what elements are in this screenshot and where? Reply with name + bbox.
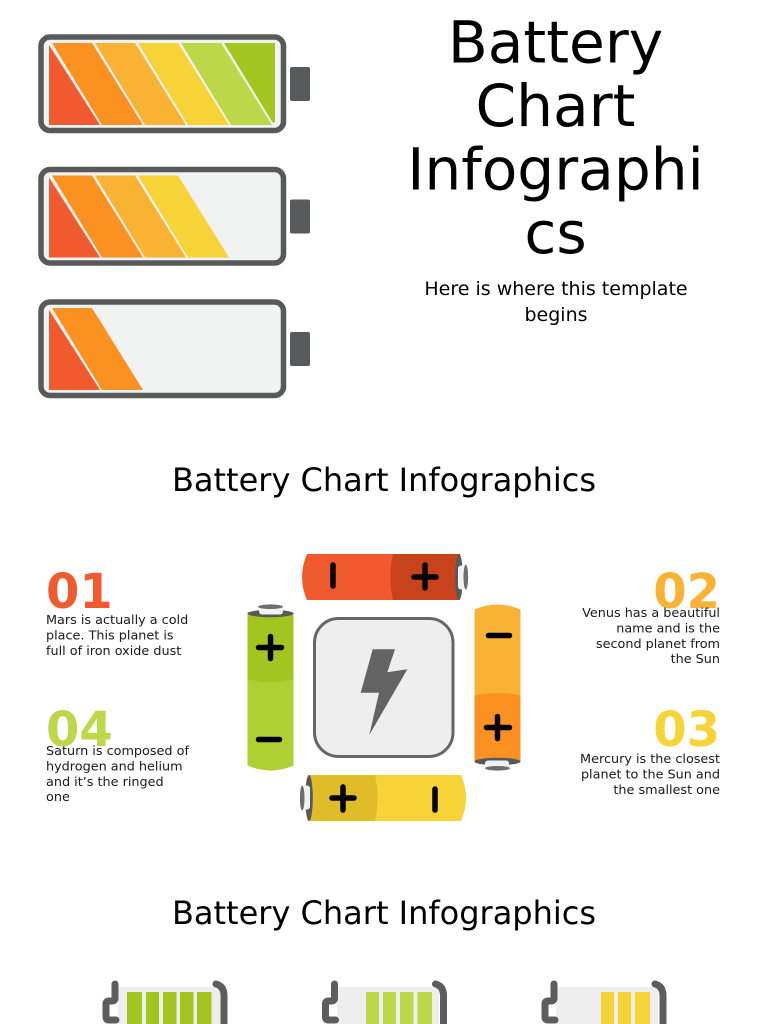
center icon: lightning bolt tile bbox=[314, 618, 453, 756]
title: Chart bbox=[476, 72, 635, 140]
heading: middle section: Battery Chart Infographics bbox=[172, 461, 596, 499]
battery: low charge bbox=[41, 302, 310, 396]
item 01: 01 bbox=[46, 564, 113, 620]
item 03: planet to the Sun and bbox=[581, 768, 720, 782]
item 02: name and is the bbox=[616, 622, 720, 636]
item 04: and it’s the ringed bbox=[46, 775, 164, 790]
item 03: Mercury is the closest bbox=[580, 752, 720, 767]
bottom battery: four bars bbox=[326, 984, 444, 1024]
bottom battery: three bars bbox=[545, 984, 663, 1024]
item 02: 02 bbox=[653, 564, 720, 620]
item 03: the smallest one bbox=[613, 783, 720, 798]
subtitle: Here is where this template bbox=[424, 278, 688, 300]
item 04: Saturn is composed of bbox=[46, 744, 189, 759]
title: cs bbox=[524, 199, 587, 267]
item 04: one bbox=[46, 790, 70, 805]
item 02: second planet from bbox=[596, 637, 720, 652]
item 02 bbox=[582, 564, 720, 667]
green AA battery bbox=[248, 604, 294, 770]
battery: medium charge bbox=[41, 170, 310, 263]
orange AA battery bbox=[474, 604, 520, 771]
item 04 bbox=[46, 702, 189, 805]
item 01 bbox=[46, 564, 188, 659]
heading: bottom section: Battery Chart Infographics bbox=[172, 894, 596, 932]
item 02: the Sun bbox=[671, 652, 720, 667]
item 01: place. This planet is bbox=[46, 628, 174, 644]
item 03 bbox=[580, 702, 720, 798]
title: Battery bbox=[448, 8, 663, 76]
item 01: Mars is actually a cold bbox=[46, 613, 188, 628]
bottom battery: five bars bbox=[106, 984, 224, 1024]
battery: full charge bbox=[41, 37, 310, 130]
item 01: full of iron oxide dust bbox=[46, 644, 181, 659]
item 02: Venus has a beautiful bbox=[582, 606, 720, 621]
subtitle: begins bbox=[524, 304, 588, 326]
title: Infographi bbox=[407, 136, 704, 204]
item 04: 04 bbox=[46, 702, 113, 758]
yellow AA battery bbox=[300, 775, 466, 821]
item 03: 03 bbox=[653, 702, 720, 758]
red AA battery bbox=[302, 554, 468, 600]
item 04: hydrogen and helium bbox=[46, 760, 183, 774]
